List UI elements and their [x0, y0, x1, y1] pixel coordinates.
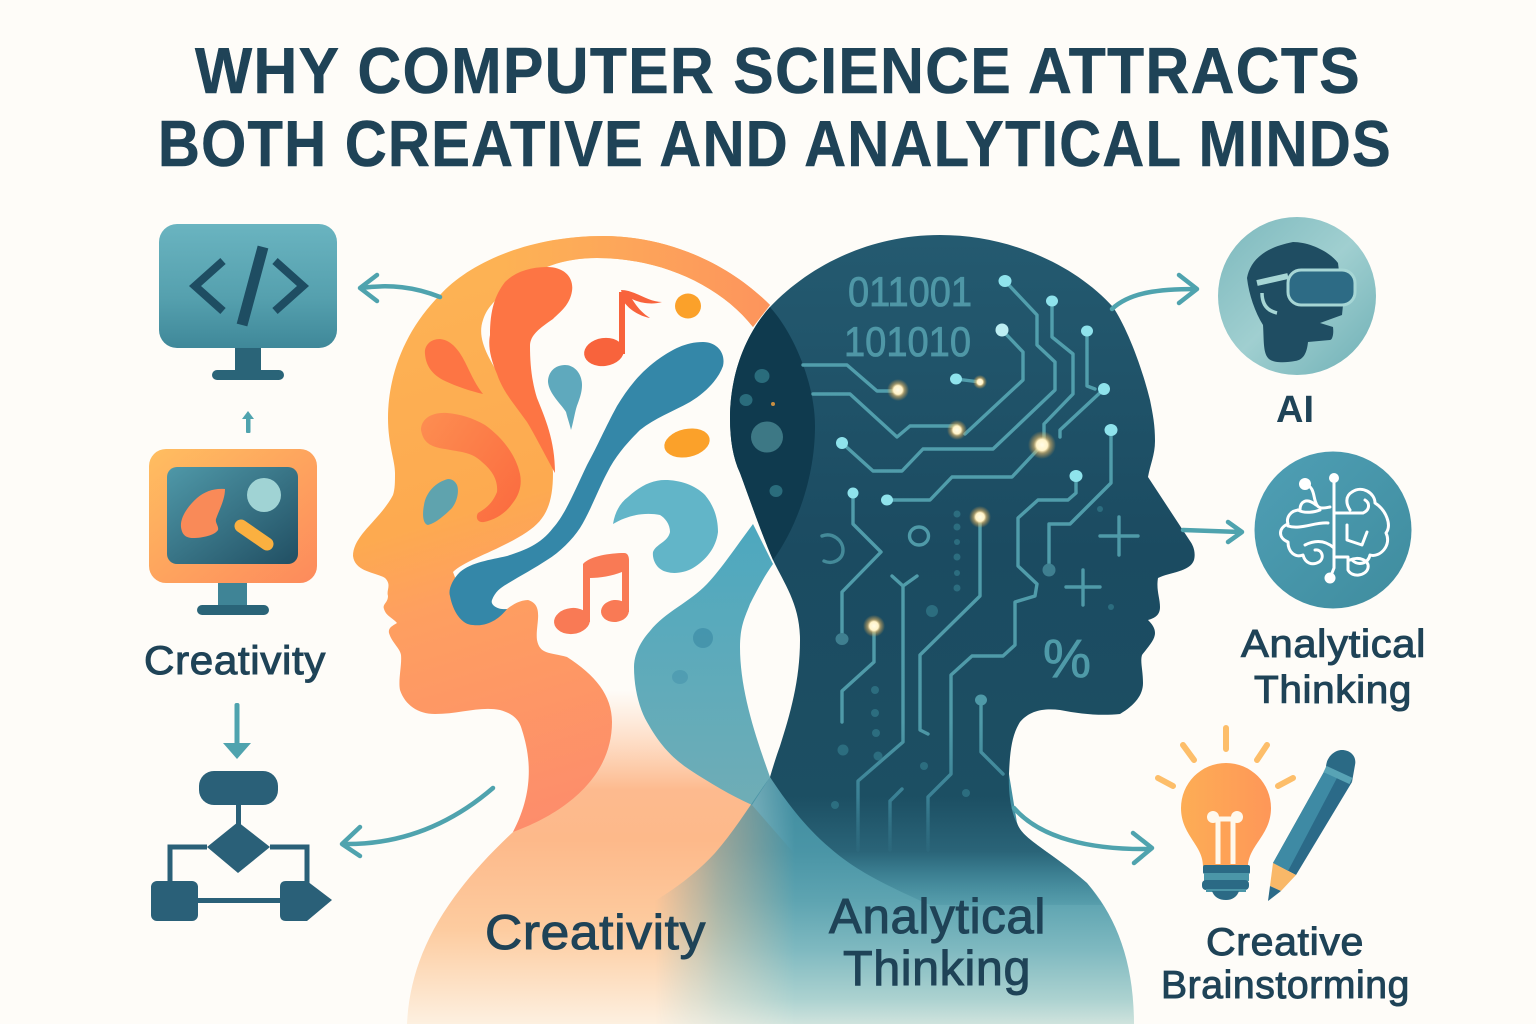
label: analytical thinking right: Analytical [1241, 623, 1426, 666]
circuit nodes [836, 275, 1118, 706]
percent symbol: % [1043, 629, 1091, 689]
label: analytical thinking right: Thinking [1254, 669, 1412, 712]
binary digits: 011001 [848, 268, 972, 315]
blue swoosh [449, 342, 724, 625]
music note bottom [553, 553, 630, 636]
overlap lens with spots [730, 307, 815, 560]
icon: flowchart [151, 771, 332, 921]
circuit traces [803, 281, 1111, 850]
icon: pencil [1268, 750, 1355, 901]
label: analytical thinking center: Analytical [829, 890, 1046, 944]
label: analytical thinking right [1241, 623, 1426, 712]
title: WHY COMPUTER SCIENCE ATTRACTS [195, 34, 1361, 107]
icon: AI head with visor [1218, 217, 1376, 375]
label: analytical thinking center: Thinking [843, 942, 1031, 996]
label: AI: AI [1276, 389, 1314, 431]
arrow: small up [242, 411, 254, 433]
arrow: head to code monitor [360, 275, 440, 301]
analytical head silhouette [730, 235, 1195, 905]
shoulders: creative figure [407, 690, 800, 1024]
large red swirl [489, 267, 572, 473]
arrow: head to bulb [1014, 808, 1152, 863]
creative brain shapes [421, 267, 724, 636]
teal neck shape [634, 524, 773, 805]
icon: light bulb [1158, 728, 1293, 900]
label: creativity center: Creativity [485, 906, 706, 960]
red drop [425, 339, 483, 394]
arrow: head to flowchart [342, 788, 493, 856]
title: BOTH CREATIVE AND ANALYTICAL MINDS [158, 107, 1392, 180]
red bean swirl [421, 413, 521, 522]
orange oval [662, 425, 712, 461]
label: creativity left: Creativity [144, 639, 326, 683]
label: creative brainstorming [1161, 921, 1410, 1007]
binary digits [844, 268, 972, 365]
label: creative brainstorming: Creative [1206, 921, 1364, 964]
icon: circuit brain [1254, 452, 1412, 608]
arrow: head to AI [1112, 275, 1197, 309]
faint dots [831, 506, 1114, 809]
teal drop [548, 365, 582, 430]
icon: creative monitor [149, 449, 317, 615]
title [158, 34, 1392, 180]
orange dot [675, 294, 701, 318]
analytical body fading [620, 774, 1134, 1024]
head crown band shading [440, 236, 770, 327]
binary digits: 101010 [844, 318, 971, 365]
teal crescent [613, 480, 718, 573]
music note top [582, 290, 662, 369]
label: creative brainstorming: Brainstorming [1161, 964, 1410, 1007]
teal neck spots [672, 628, 713, 684]
decorative symbols [822, 517, 1138, 605]
icon: code monitor [159, 224, 337, 380]
arrow: small down [223, 703, 251, 759]
creative head silhouette [353, 236, 770, 832]
teal leaf [423, 479, 458, 525]
label: analytical thinking center [829, 890, 1046, 996]
arrow: head to analytical icon [1183, 522, 1242, 542]
